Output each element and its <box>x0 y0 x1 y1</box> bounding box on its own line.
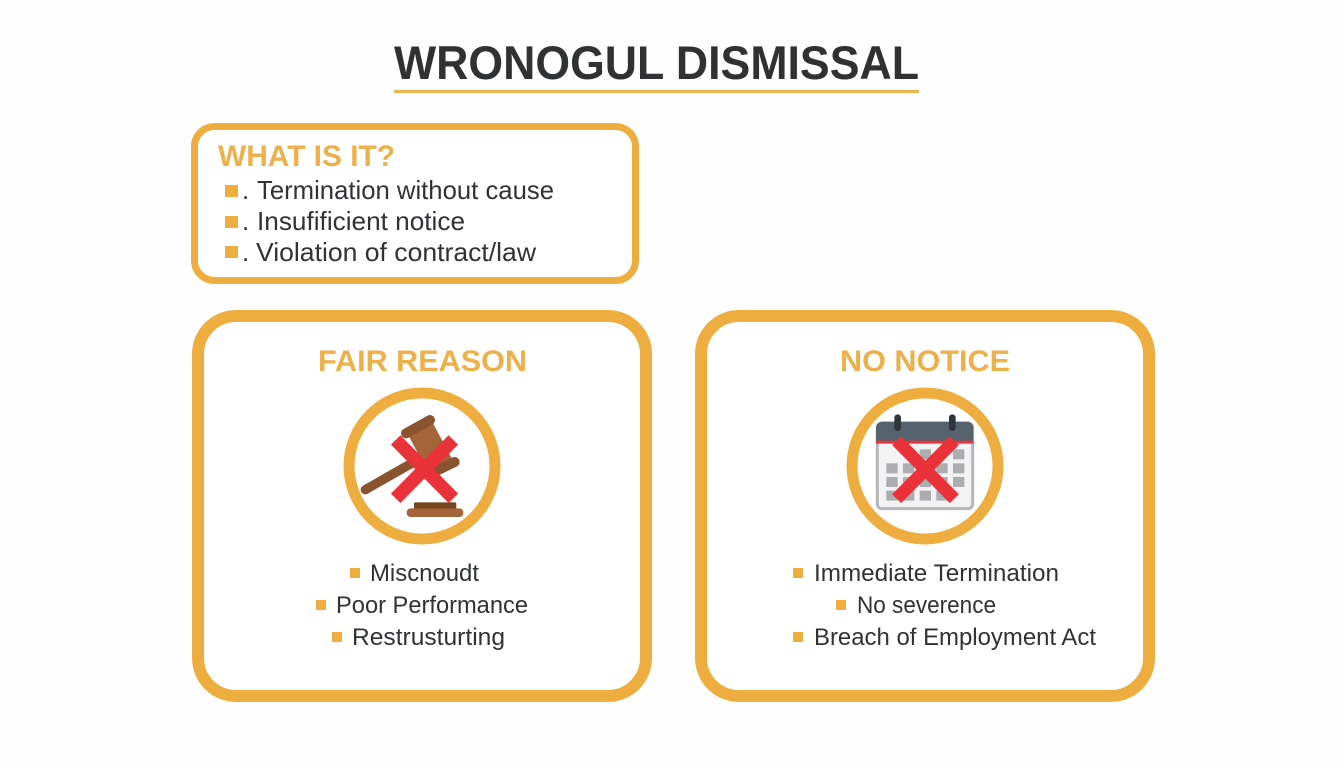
bullet list: no notice: Immediate Termination <box>814 560 1059 587</box>
bullet list: fair reason <box>316 560 528 651</box>
bullet list: no notice <box>793 560 1096 651</box>
panel: no notice <box>701 316 1149 696</box>
bullet list: definition: Termination without cause <box>257 175 554 205</box>
heading: no notice: NO NOTICE <box>840 345 1010 378</box>
heading: fair reason: FAIR REASON <box>318 345 527 378</box>
title: WRONOGUL DISMISSAL <box>394 36 919 89</box>
bullet list: definition: . <box>242 206 249 236</box>
bullet list: definition: . <box>242 175 249 205</box>
bullet list: definition: Insufificient notice <box>257 206 465 236</box>
bullet list: definition: Violation of contract/law <box>256 237 536 267</box>
heading: what is it: WHAT IS IT? <box>218 140 395 173</box>
bullet list: definition <box>225 175 554 267</box>
icon: crossed-out gavel <box>349 393 495 539</box>
bullet list: definition: . <box>242 237 249 267</box>
panel: what is it <box>194 126 636 280</box>
bullet list: fair reason: Miscnoudt <box>370 560 479 587</box>
bullet list: fair reason: Poor Performance <box>336 592 528 619</box>
bullet list: no notice: Breach of Employment Act <box>814 624 1096 651</box>
bullet list: no notice: No severence <box>857 592 996 619</box>
icon: crossed-out calendar <box>852 393 998 539</box>
bullet list: fair reason: Restrusturting <box>352 624 505 651</box>
panel: fair reason <box>198 316 646 696</box>
